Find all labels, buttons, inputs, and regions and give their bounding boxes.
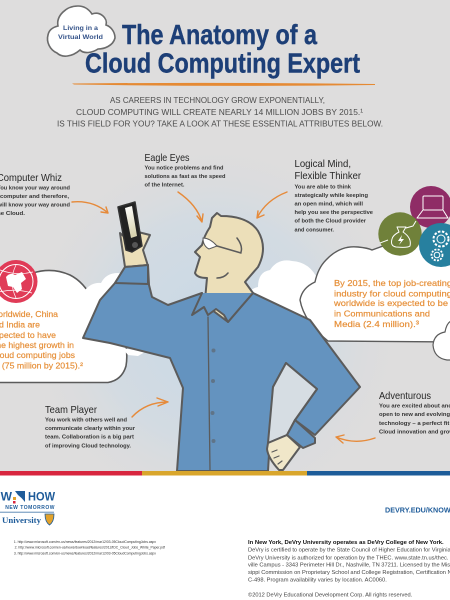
intro text: AS CAREERS IN TECHNOLOGY GROW EXPONENTIALLY, [110, 95, 325, 105]
attribute: team player: of improving Cloud technology. [45, 444, 131, 450]
man: buttons [210, 348, 216, 443]
footnotes: 3. http://www.microsoft.com/en-us/news/features/2012/mar12/03-05CloudComputingJobs.aspx [14, 552, 156, 556]
attribute: computer whiz [0, 172, 70, 217]
attribute: adventurous: You are excited about and [379, 404, 450, 410]
attribute: adventurous [379, 390, 450, 436]
icon: phone [118, 202, 142, 252]
right cloud [300, 240, 450, 342]
logo: know how: HOW [28, 490, 56, 504]
legal text: C-498. Program availability varies by location. AC0060. [248, 578, 387, 584]
left cloud stat text [0, 309, 83, 370]
right cloud stat text: By 2015, the top job-creating [334, 278, 450, 288]
footnotes: 2. http://www.microsoft.com/en-us/news/download/features/2012/IDC_Cloud_Jobs_White_Paper.pdf [15, 546, 165, 550]
small cloud behind shoulder [245, 260, 325, 320]
legal text [248, 540, 450, 599]
arrow: eagle eyes [178, 192, 203, 222]
attribute: team player: Team Player [45, 404, 97, 416]
man: raised hand [120, 232, 150, 267]
footnotes [14, 540, 165, 556]
attribute: logical mind: Flexible Thinker [294, 170, 361, 182]
footer panel [0, 476, 450, 600]
attribute: logical mind: You are able to think [294, 184, 352, 190]
attribute: team player: You work with others well and [45, 418, 127, 424]
small right cloud [433, 320, 450, 360]
icon: globe [0, 260, 38, 303]
attribute: logical mind: help you see the perspective [294, 210, 374, 216]
arrow: computer whiz [72, 202, 108, 213]
colour band [0, 471, 450, 476]
attribute: logical mind: of both the Cloud provider [294, 218, 367, 224]
right cloud stat text [333, 278, 450, 329]
right cloud stat text: in Communications and [334, 308, 430, 318]
right cloud stat text: industry for cloud computing [334, 288, 450, 298]
man: right cuff [287, 420, 315, 448]
logo: know how: NEW TOMORROW [5, 505, 55, 511]
man: collar [192, 293, 253, 322]
orange title rule [72, 83, 375, 86]
cloud badge text: Living in a [63, 25, 98, 32]
attribute: eagle eyes: Eagle Eyes [144, 152, 190, 164]
left cloud [0, 270, 127, 382]
arrow: team player [132, 398, 168, 417]
attribute: team player [45, 404, 136, 450]
attribute: eagle eyes: of the Internet. [144, 182, 185, 188]
man: glasses [203, 238, 217, 249]
logo: know how: University [2, 515, 42, 525]
intro text [57, 95, 383, 128]
legal text: DeVry University is authorized for operation by the THEC. www.state.tn.us/thec. [248, 555, 449, 561]
attribute: logical mind [294, 158, 374, 234]
legal text: ©2012 DeVry Educational Development Corp. All rights reserved. [248, 592, 413, 599]
illustration: man [83, 202, 360, 471]
small cloud behind sleeve [85, 273, 152, 330]
logo: know how: W [1, 490, 13, 504]
attribute: logical mind: Logical Mind, [294, 158, 351, 170]
title [85, 19, 360, 78]
background panel [0, 0, 450, 471]
man: placket [208, 317, 210, 470]
attribute: adventurous: Adventurous [379, 390, 431, 402]
attribute: logical mind: and consumer. [294, 228, 334, 234]
title: The Anatomy of a [122, 19, 317, 50]
attribute: adventurous: open to new and evolving [379, 412, 450, 418]
attribute: eagle eyes: You notice problems and find [144, 166, 224, 172]
icon: shield [45, 514, 54, 525]
arrow: adventurous [336, 435, 375, 443]
left cloud stat text: (75 million by 2015).² [2, 360, 83, 370]
attribute: team player: communicate clearly within your [45, 426, 136, 432]
cloud badge text: Virtual World [58, 34, 103, 41]
attribute: logical mind: strategically while keeping [294, 193, 368, 199]
title: Cloud Computing Expert [85, 48, 360, 78]
legal text: In New York, DeVry University operates as DeVry College of New York. [248, 540, 444, 546]
icon: gears [419, 223, 450, 267]
man: sleeve cuff [115, 265, 148, 284]
intro text: CLOUD COMPUTING WILL CREATE NEARLY 14 MILLION JOBS BY 2015.¹ [76, 107, 363, 117]
attribute: logical mind: an open mind, which will [294, 202, 363, 208]
icon: money bag [378, 212, 422, 256]
right cloud stat text: Media (2.4 million).³ [334, 319, 419, 329]
attribute: eagle eyes [144, 152, 226, 188]
website url: DEVRY.EDU/KNOW [385, 506, 450, 514]
right cloud stat text: worldwide is expected to be [333, 298, 448, 308]
cloud badge [47, 6, 115, 56]
logo: know how [0, 490, 56, 525]
white patch under arm [122, 348, 145, 356]
arrow: logical mind [257, 192, 287, 218]
man: gap between arm and body [268, 363, 317, 443]
legal text: DeVry is certified to operate by the State Council of Higher Education for Virginia. [248, 548, 450, 554]
icon: laptop [410, 186, 450, 228]
man: hand on hip [267, 435, 300, 470]
cloud badge text [58, 25, 103, 41]
intro text: IS THIS FIELD FOR YOU? TAKE A LOOK AT THESE ESSENTIAL ATTRIBUTES BELOW. [57, 118, 383, 128]
footnotes: 1. http://www.microsoft.com/en-us/news/features/2012/mar12/03-05CloudComputingJobs.aspx [14, 540, 156, 544]
attribute: team player: team. Collaboration is a big part [45, 434, 134, 440]
attribute: eagle eyes: solutions as fast as the speed [144, 174, 226, 180]
man: head [195, 213, 263, 322]
man: shirt [83, 265, 360, 471]
